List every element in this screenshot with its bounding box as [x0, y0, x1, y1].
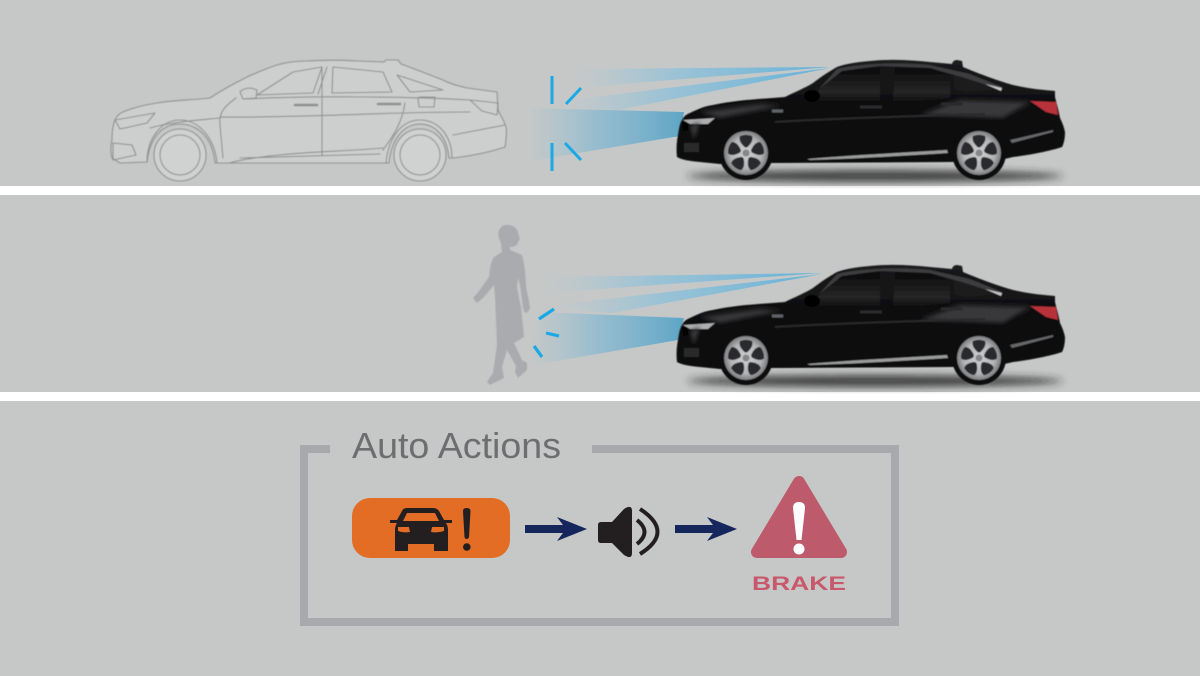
detection ticks [534, 309, 559, 357]
panel: auto actions [304, 425, 895, 622]
panel: vehicle detection [111, 60, 1065, 182]
door handles [860, 104, 963, 107]
arrow [525, 517, 587, 541]
brake label: BRAKE [752, 574, 846, 595]
panel: pedestrian detection [473, 225, 1065, 387]
ground shadow [687, 170, 1063, 182]
detection ticks [552, 76, 581, 171]
icon: brake warning triangle [757, 482, 841, 554]
quarter window [953, 75, 1000, 92]
sensor beams [528, 273, 822, 366]
shoulder reflection [920, 100, 1030, 118]
divider: upper white band [0, 186, 1200, 195]
bumper highlight [1010, 130, 1053, 143]
divider: lower white band [0, 392, 1200, 401]
car body [677, 60, 1065, 164]
roof chrome [818, 63, 1002, 90]
tail light [1030, 101, 1058, 115]
arrow [675, 517, 737, 541]
frame [304, 449, 895, 622]
outline car (detected vehicle) [111, 60, 506, 181]
pedestrian silhouette [473, 225, 530, 385]
sensor beams [525, 67, 830, 162]
black car [677, 265, 1065, 387]
icon: speaker [598, 507, 658, 557]
heading: Auto Actions [352, 425, 561, 466]
badge [772, 110, 783, 112]
icon: forward collision warning [352, 498, 510, 558]
front fascia glare [690, 122, 700, 140]
sill highlight [807, 150, 948, 160]
side windows [817, 67, 950, 105]
headlight [683, 118, 715, 124]
black car [677, 60, 1065, 182]
mirror [804, 90, 820, 102]
